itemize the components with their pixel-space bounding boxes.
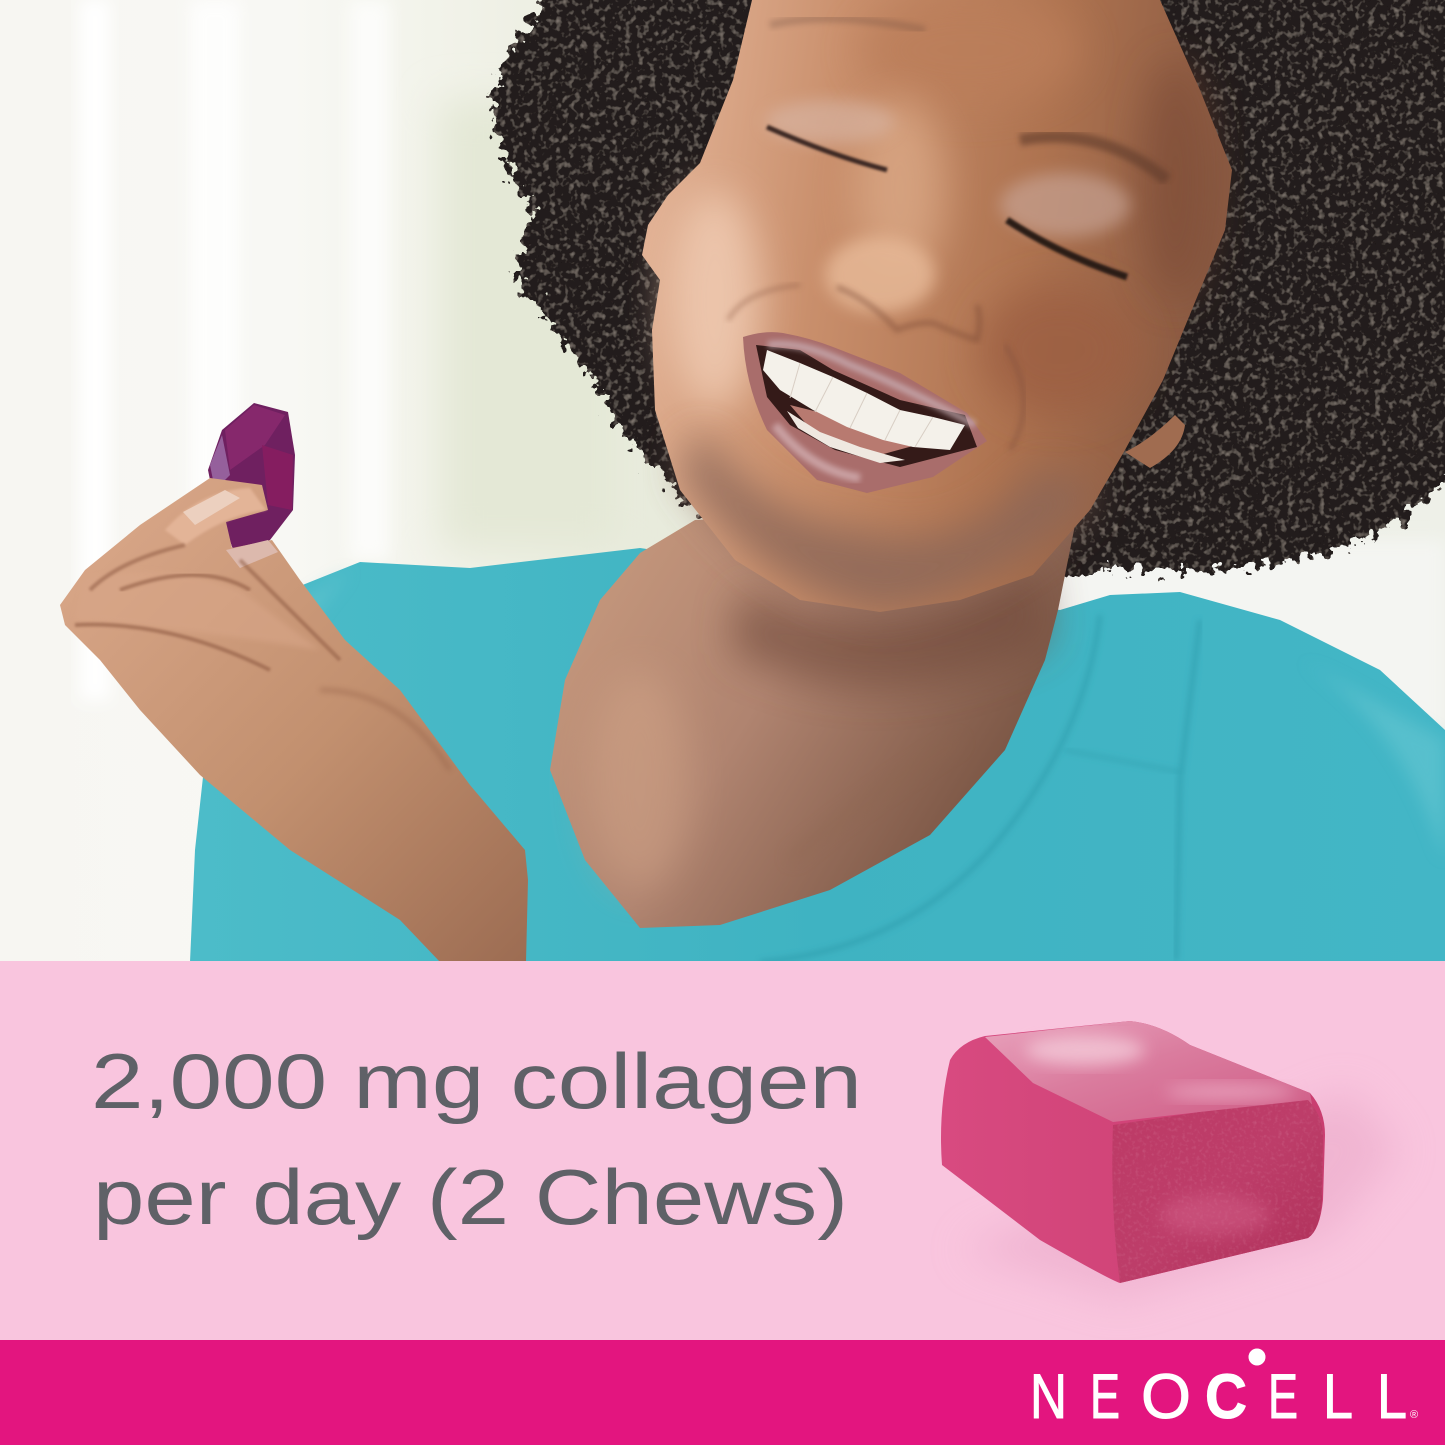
text: 2,000 mg collagen per day (2 Chews): [91, 1037, 862, 1241]
icon: collagen chew: [941, 1021, 1400, 1300]
hair: [492, 0, 1445, 590]
ear: [1125, 415, 1185, 468]
pink panel: [0, 961, 1445, 1341]
logo: NEOCELL: N: [1030, 1362, 1067, 1432]
mouth: [743, 332, 987, 493]
background curtain: [0, 0, 1445, 962]
smile crease: [728, 285, 800, 320]
shirt: [190, 548, 1445, 962]
text: 2,000 mg collagen per day (2 Chews): per day (2 Chews): [93, 1153, 848, 1241]
panel: lifestyle photo: [0, 0, 1445, 962]
logo: NEOCELL: C: [1205, 1362, 1247, 1432]
logo: NEOCELL: [1030, 1349, 1418, 1432]
hand: [60, 478, 528, 962]
gummy: [208, 403, 295, 555]
neck: [550, 500, 1080, 928]
eye lashes: [767, 127, 887, 170]
logo: NEOCELL: ®: [1410, 1409, 1418, 1421]
eyebrows: [770, 19, 925, 30]
logo: NEOCELL: E: [1268, 1362, 1298, 1432]
text: 2,000 mg collagen per day (2 Chews): 2,000 mg collagen: [91, 1037, 862, 1125]
logo: NEOCELL: E: [1090, 1362, 1120, 1432]
logo: NEOCELL: L: [1377, 1362, 1407, 1432]
face: [642, 0, 1232, 612]
logo: NEOCELL: L: [1323, 1362, 1353, 1432]
logo: NEOCELL: O: [1141, 1362, 1191, 1432]
bottom brand bar: [0, 1340, 1445, 1445]
eyelids: [765, 100, 895, 144]
nose: [825, 237, 980, 340]
